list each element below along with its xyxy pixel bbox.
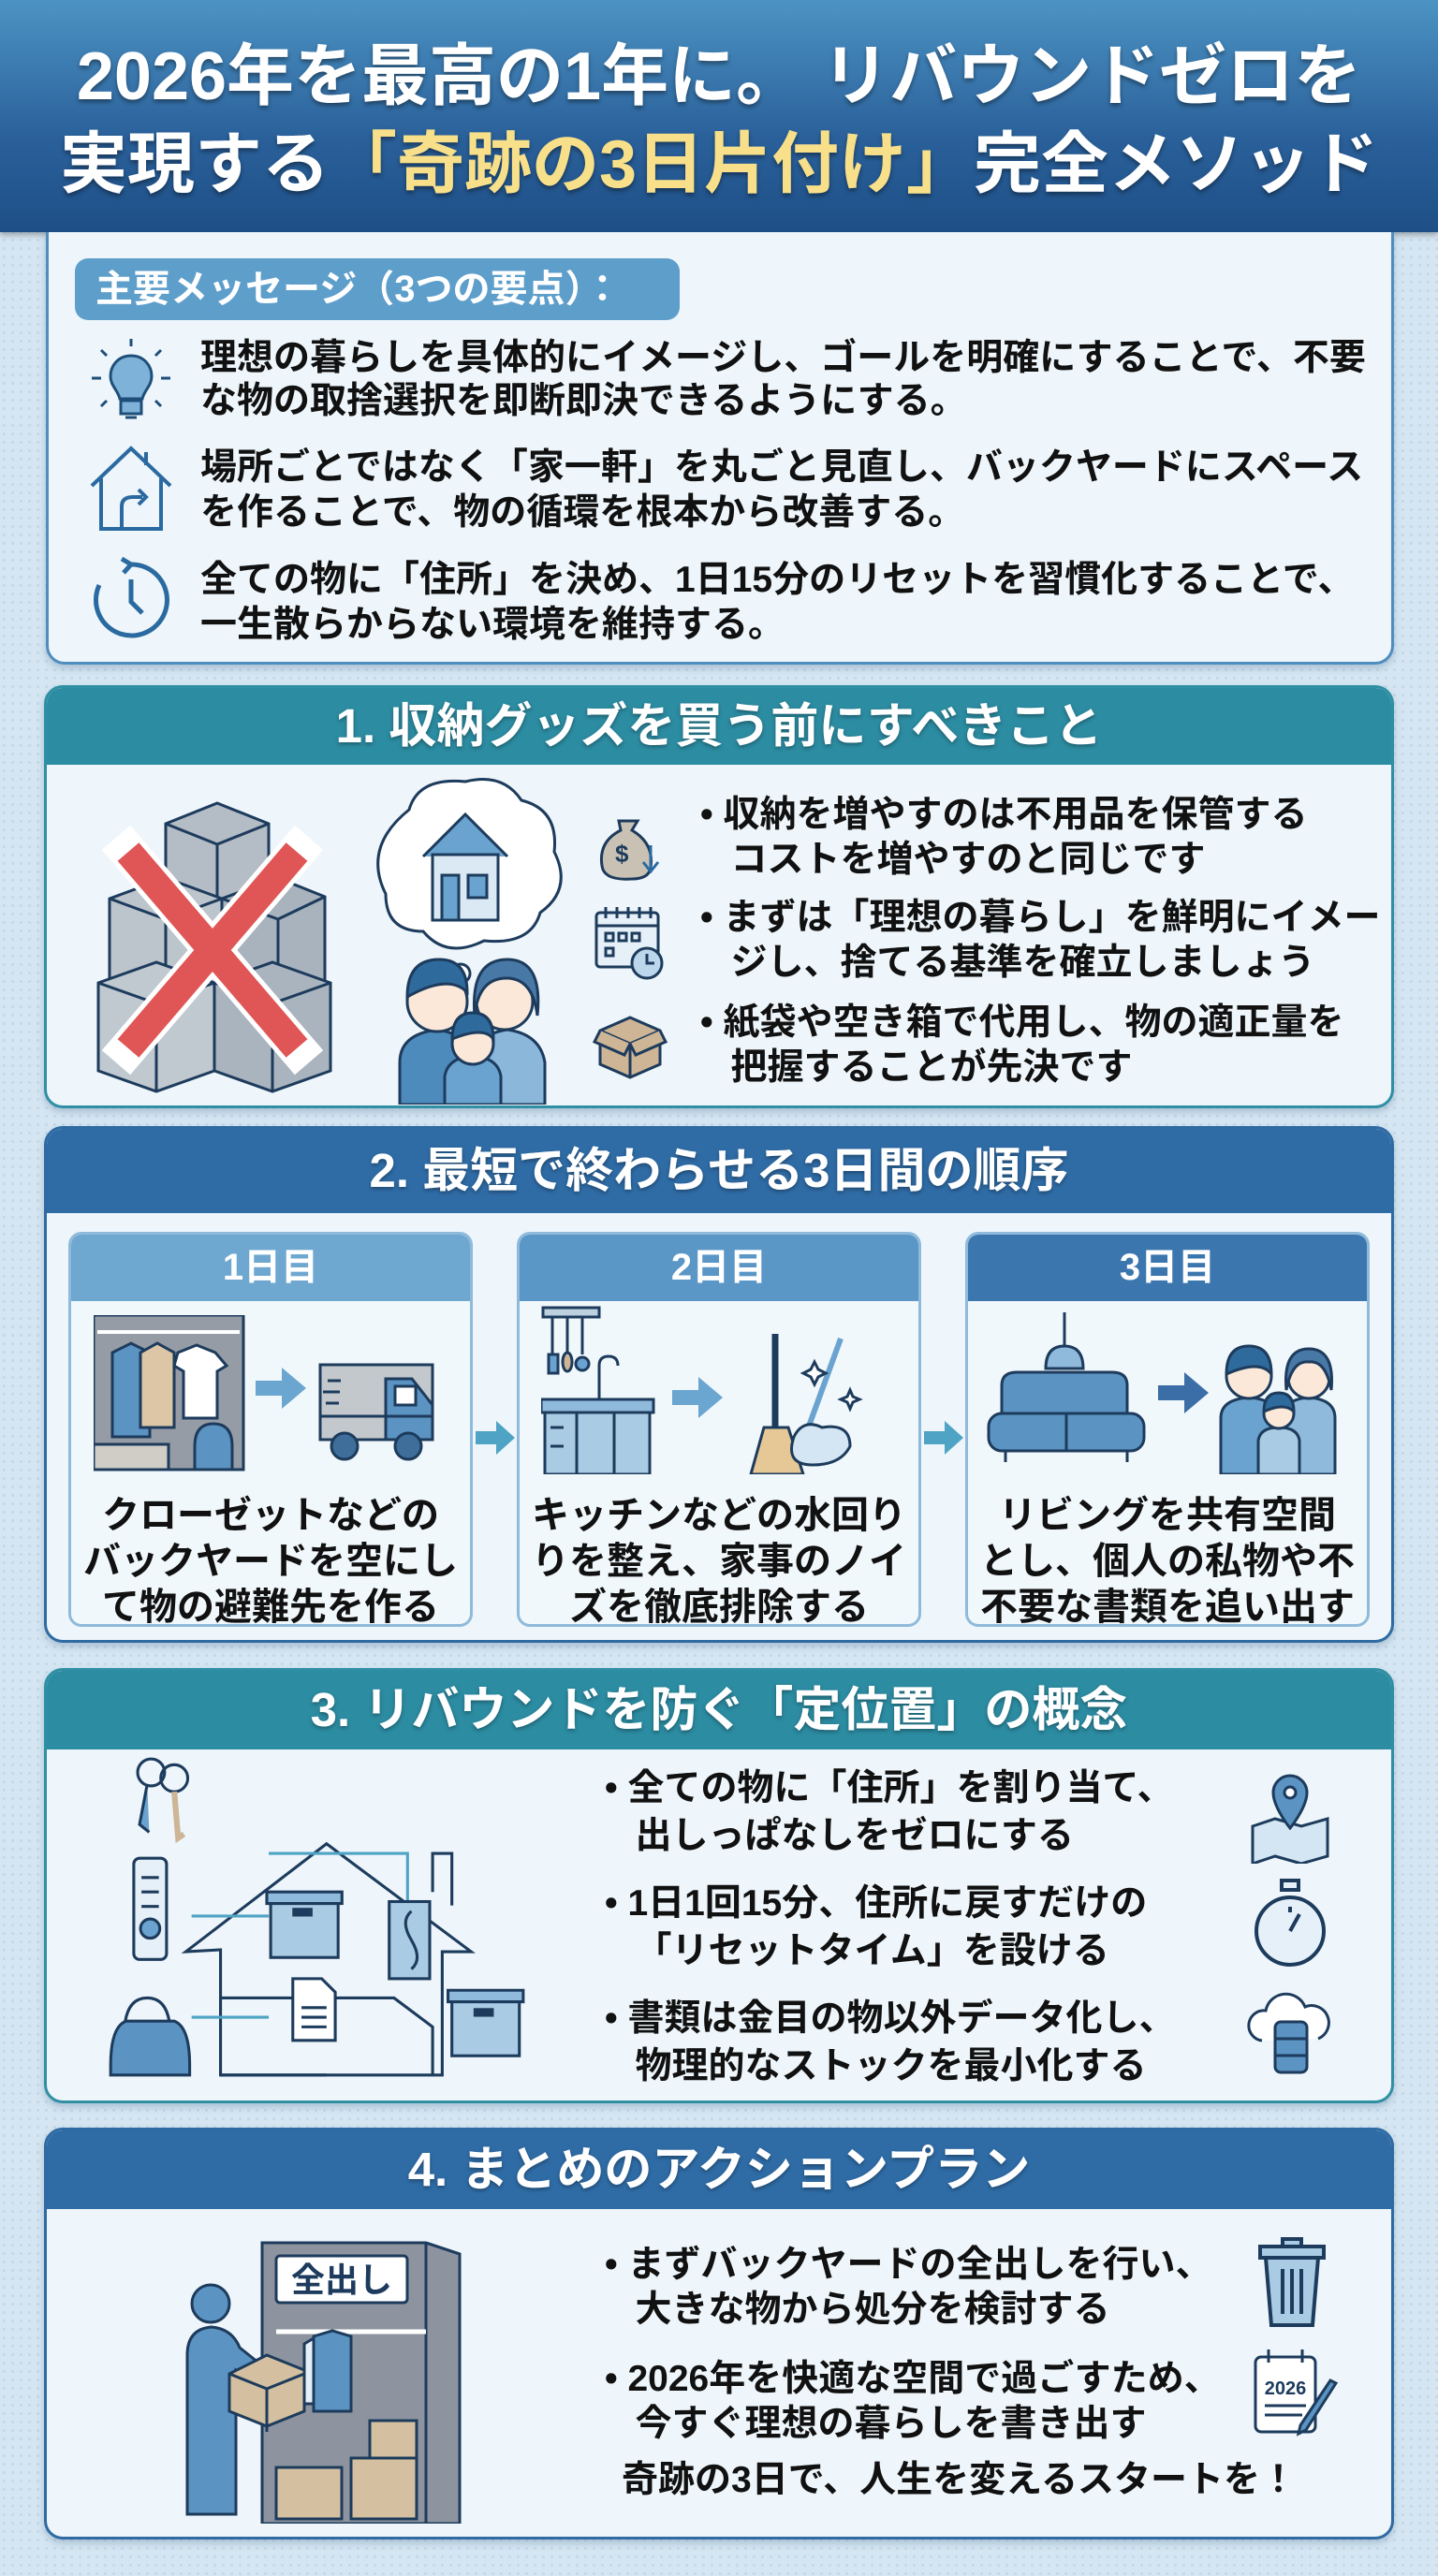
message 2: 場所ごとではなく「家一軒」を丸ごと見直し、バックヤードにスペース	[200, 447, 1363, 488]
icon: 2026 calendar with pen	[1255, 2349, 1339, 2437]
bullet 2	[605, 1883, 1147, 1971]
illustration: thought bubble with house	[376, 778, 563, 1105]
panel: section 1	[44, 685, 1394, 1108]
day 2 header	[520, 1235, 918, 1301]
day 1 text: バックヤードを空にし	[83, 1541, 458, 1582]
bullet 1: コストを増やすのと同じです	[730, 840, 1206, 880]
icon: money bag	[599, 820, 659, 881]
icon: light bulb	[92, 339, 170, 419]
bullet 1: • 全ての物に「住所」を割り当て、	[605, 1768, 1174, 1808]
day 3 header: 3日目	[1120, 1247, 1215, 1288]
icon: map pin	[1251, 1775, 1329, 1864]
message 3	[200, 560, 1354, 645]
card: day 3	[965, 1232, 1370, 1627]
day 1 text: て物の避難先を作る	[102, 1587, 439, 1627]
bullet 1: 出しっぱなしをゼロにする	[635, 1816, 1074, 1856]
bullet 3: • 書類は金目の物以外データ化し、	[605, 1998, 1176, 2039]
day 3 text: 不要な書類を追い出す	[980, 1587, 1355, 1627]
day 2 text: キッチンなどの水回り	[532, 1495, 906, 1536]
icon: calendar clock	[595, 907, 663, 979]
arrow: day1 to day2	[476, 1421, 515, 1455]
heading 1	[47, 688, 1391, 765]
icon: stopwatch	[1255, 1879, 1326, 1967]
illustration: kitchen to broom	[541, 1307, 863, 1474]
icon: clock cycle	[94, 556, 169, 638]
bullet 2: • 1日1回15分、住所に戻すだけの	[605, 1883, 1147, 1924]
day 2 text: ズを徹底排除する	[569, 1587, 869, 1627]
day 1 header	[71, 1235, 470, 1301]
card: day 2	[517, 1232, 921, 1627]
bullet 2: • まずは「理想の暮らし」を鮮明にイメー	[700, 898, 1380, 938]
icon: money bag: $	[615, 840, 629, 868]
panel: section 4	[44, 2128, 1394, 2539]
bullet 3: 把握することが先決です	[730, 1047, 1133, 1088]
icon: trash can	[1258, 2237, 1326, 2327]
heading 1: 1. 収納グッズを買う前にすべきこと	[336, 699, 1102, 753]
message 2: を作ることで、物の循環を根本から改善する。	[200, 492, 964, 533]
bullet 2	[605, 2359, 1221, 2444]
closing line: 奇跡の3日で、人生を変えるスタートを！	[622, 2460, 1297, 2500]
bullet 1	[700, 795, 1307, 880]
bullet 3	[605, 1998, 1176, 2086]
panel: section 3	[44, 1668, 1394, 2103]
message 3: 全ての物に「住所」を決め、1日15分のリセットを習慣化することで、	[200, 560, 1354, 600]
pill label	[75, 258, 680, 320]
day 2 text: りを整え、家事のノイ	[532, 1541, 906, 1582]
day 3 text	[980, 1495, 1355, 1627]
illustration: closet to truck	[94, 1315, 434, 1471]
pill label: 主要メッセージ（3つの要点）：	[95, 269, 621, 310]
icon: house with arrow	[90, 446, 172, 531]
heading 4	[47, 2130, 1391, 2209]
message 1: 理想の暮らしを具体的にイメージし、ゴールを明確にすることで、不要	[200, 338, 1366, 378]
bullet 2: 「リセットタイム」を設ける	[635, 1931, 1109, 1971]
panel: section 2	[44, 1126, 1394, 1643]
heading 2	[47, 1129, 1391, 1213]
day 1 header: 1日目	[223, 1247, 318, 1288]
icon: 2026 calendar with pen: 2026	[1265, 2378, 1306, 2399]
icon: cloud database	[1247, 1992, 1330, 2074]
illustration: stacked boxes with red X	[97, 801, 331, 1093]
bullet 2	[700, 898, 1380, 983]
day 3 header	[968, 1235, 1367, 1301]
bullet 3	[700, 1003, 1344, 1088]
heading 3: 3. リバウンドを防ぐ「定位置」の概念	[311, 1683, 1127, 1736]
message 1: な物の取捨選択を即断即決できるようにする。	[200, 381, 967, 421]
illustration: person emptying closet: 全出し	[291, 2261, 392, 2299]
bullet 1: 大きな物から処分を検討する	[635, 2290, 1110, 2330]
illustration: sofa to family	[987, 1312, 1337, 1474]
day 1 text	[83, 1495, 458, 1627]
bullet 2: 今すぐ理想の暮らしを書き出す	[635, 2404, 1147, 2444]
day 2 header: 2日目	[671, 1247, 767, 1288]
day 3 text: とし、個人の私物や不	[980, 1541, 1355, 1582]
bullet 1: • まずバックヤードの全出しを行い、	[605, 2245, 1211, 2285]
heading 3	[47, 1671, 1391, 1749]
day 1 text: クローゼットなどの	[102, 1495, 439, 1536]
bullet 1	[605, 1768, 1174, 1856]
bullet 1	[605, 2245, 1211, 2330]
panel: key messages	[46, 232, 1394, 665]
title line 2: 実現する「奇跡の3日片付け」完全メソッド	[60, 127, 1378, 202]
bullet 2: ジし、捨てる基準を確立しましょう	[730, 943, 1315, 983]
message 3: 一生散らからない環境を維持する。	[200, 605, 785, 645]
heading 2: 2. 最短で終わらせる3日間の順序	[369, 1144, 1069, 1197]
day 2 text	[532, 1495, 906, 1627]
heading 4: 4. まとめのアクションプラン	[408, 2143, 1030, 2196]
bullet 3: 物理的なストックを最小化する	[635, 2046, 1147, 2086]
bullet 3: • 紙袋や空き箱で代用し、物の適正量を	[700, 1003, 1344, 1043]
bullet 2: • 2026年を快適な空間で過ごすため、	[605, 2359, 1221, 2399]
illustration: person emptying closet	[185, 2241, 461, 2524]
title line 1: 2026年を最高の1年に。 リバウンドゼロを	[77, 39, 1361, 114]
arrow: day2 to day3	[924, 1421, 963, 1455]
day 3 text: リビングを共有空間	[999, 1495, 1336, 1536]
icon: cardboard box	[593, 1016, 668, 1079]
bullet 1: • 収納を増やすのは不用品を保管する	[700, 795, 1307, 835]
message 1	[200, 337, 1366, 421]
title banner	[0, 0, 1438, 232]
illustration: house with assigned places	[109, 1758, 524, 2076]
message 2	[200, 447, 1363, 533]
card: day 1	[68, 1232, 473, 1627]
